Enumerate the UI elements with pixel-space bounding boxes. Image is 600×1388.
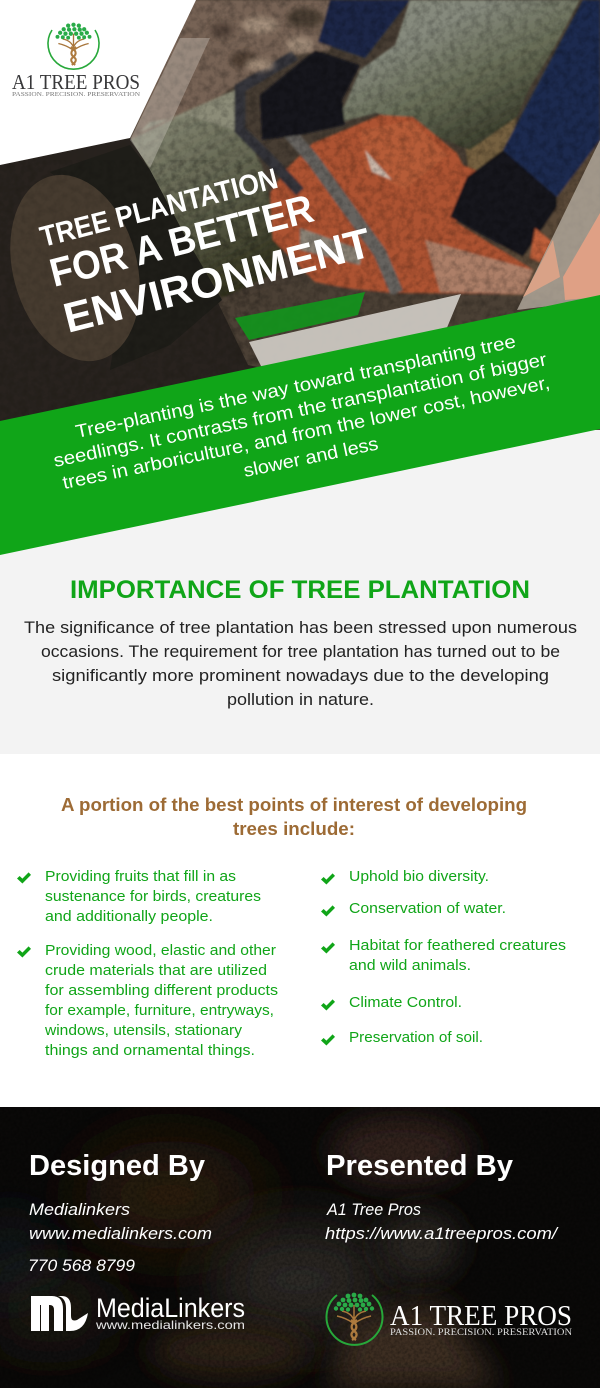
list: left column benefits: for assembling different products xyxy=(45,982,278,999)
chainsaw body xyxy=(270,115,533,294)
logo: MediaLinkers: MediaLinkers xyxy=(96,1293,245,1323)
list: right column benefits: Climate Control. xyxy=(349,994,462,1011)
text block: importance paragraph: occasions. The requirement for tree plantation has turned out to be xyxy=(41,642,560,661)
footer: designed by xyxy=(28,1150,212,1275)
list: right column benefits: Conservation of water. xyxy=(349,900,506,917)
list: left column benefits: sustenance for birds, creatures xyxy=(45,888,261,905)
intro text xyxy=(52,330,551,493)
logo: MediaLinkers xyxy=(31,1293,245,1332)
logo: A1 Tree Pros footer xyxy=(327,1293,573,1345)
footer: presented by xyxy=(325,1150,559,1243)
panel: footer background xyxy=(0,1107,600,1388)
translucent white shard xyxy=(249,294,461,368)
wood chips ground xyxy=(130,0,345,140)
footer: designed by: www.medialinkers.com xyxy=(29,1224,212,1243)
footer: designed by: Designed By xyxy=(29,1150,205,1182)
intro text: seedlings. It contrasts from the transplantation of bigger xyxy=(52,348,548,471)
list: left column benefits: crude materials that are utilized xyxy=(45,962,267,979)
panel: logo corner xyxy=(0,0,196,165)
right sleeve xyxy=(503,0,600,197)
list: right column benefits: Uphold bio diversity. xyxy=(349,868,489,885)
translucent light shard upper xyxy=(130,38,210,168)
list: right column benefits: Preservation of soil. xyxy=(349,1029,483,1046)
logo: A1 Tree Pros footer: PASSION. PRECISION. PRESERVATION xyxy=(390,1327,573,1337)
panel: green intro band xyxy=(0,295,600,555)
title xyxy=(37,163,376,342)
translucent green shard xyxy=(235,292,365,340)
title: FOR A BETTER xyxy=(45,187,318,296)
footer: presented by: https://www.a1treepros.com/ xyxy=(325,1224,559,1243)
list: left column benefits: for example, furniture, entryways, xyxy=(45,1002,274,1019)
list: left column benefits: windows, utensils, stationary xyxy=(44,1022,243,1039)
intro text: slower and less xyxy=(242,433,380,481)
list: left column benefits: things and ornamental things. xyxy=(45,1042,255,1059)
logo: A1 Tree Pros footer: A1 TREE PROS xyxy=(390,1300,572,1332)
saw frame xyxy=(240,55,300,192)
panel: hero photo xyxy=(0,0,600,440)
footer: presented by: A1 Tree Pros xyxy=(326,1200,421,1219)
right glove xyxy=(450,150,557,257)
title: TREE PLANTATION xyxy=(37,163,281,254)
heading: benefits xyxy=(61,795,527,839)
intro text: trees in arboriculture, and from the lower cost, however, xyxy=(61,372,551,493)
list: right column benefits xyxy=(321,868,566,1046)
lower ground xyxy=(224,284,523,300)
list: left column benefits xyxy=(17,868,278,1059)
light chip blotches xyxy=(210,8,323,71)
text block: importance paragraph: The significance of tree plantation has been stressed upon numerous xyxy=(24,618,577,637)
text block: importance paragraph: significantly more prominent nowadays due to the developing xyxy=(52,666,549,685)
footer: designed by: Medialinkers xyxy=(29,1200,131,1219)
panel: importance section background xyxy=(0,430,600,754)
heading: importance: IMPORTANCE OF TREE PLANTATION xyxy=(70,576,530,604)
footer: presented by: Presented By xyxy=(326,1150,513,1182)
text block: importance paragraph xyxy=(24,618,577,709)
logo wordmark: A1 TREE PROS xyxy=(12,70,140,94)
logo: MediaLinkers: www.medialinkers.com xyxy=(95,1318,245,1332)
text block: importance paragraph: pollution in nature. xyxy=(227,690,374,709)
heading: benefits: A portion of the best points of interest of developing xyxy=(61,795,527,815)
list: left column benefits: and additionally people. xyxy=(45,908,213,925)
left glove xyxy=(260,50,360,140)
dark overlay left xyxy=(0,138,262,430)
left sleeve xyxy=(318,0,410,58)
icon: tree logo xyxy=(48,23,99,69)
list: left column benefits: Providing fruits that fill in as xyxy=(45,868,236,885)
title: ENVIRONMENT xyxy=(59,219,376,342)
footer: designed by: 770 568 8799 xyxy=(28,1256,136,1275)
left log xyxy=(131,116,280,298)
list: right column benefits: and wild animals. xyxy=(349,957,471,974)
intro text: Tree-planting is the way toward transplanting tree xyxy=(74,330,517,442)
heading: benefits: trees include: xyxy=(233,819,355,839)
upper log xyxy=(337,0,580,150)
cut log end xyxy=(10,174,140,361)
list: right column benefits: Habitat for feathered creatures xyxy=(349,937,566,954)
panel: logo corner: PASSION. PRECISION. PRESERVATION xyxy=(12,92,141,98)
translucent light shard right xyxy=(517,140,600,310)
list: left column benefits: Providing wood, elastic and other xyxy=(45,942,276,959)
